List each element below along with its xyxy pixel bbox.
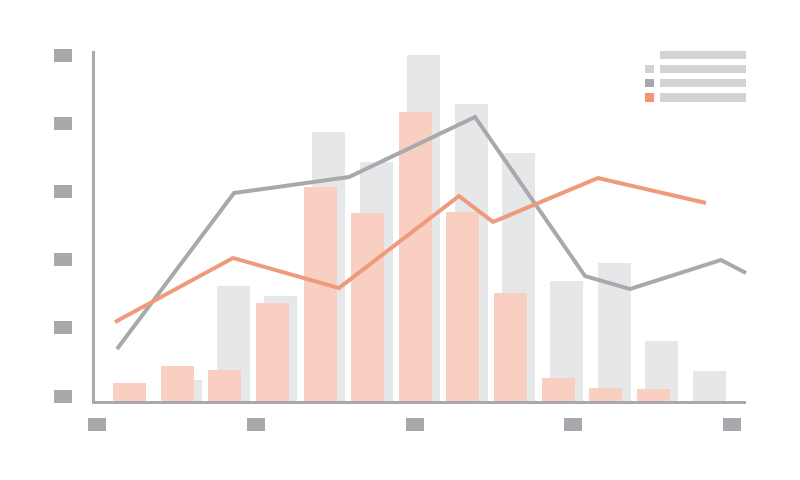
grey bar series	[169, 55, 726, 402]
x axis label placeholders	[88, 418, 741, 431]
orange line series	[115, 178, 706, 322]
pink bar series	[113, 112, 670, 402]
y axis label placeholders	[54, 49, 72, 403]
grey line series	[117, 117, 746, 349]
legend	[645, 51, 746, 102]
chart axes	[94, 51, 746, 402]
